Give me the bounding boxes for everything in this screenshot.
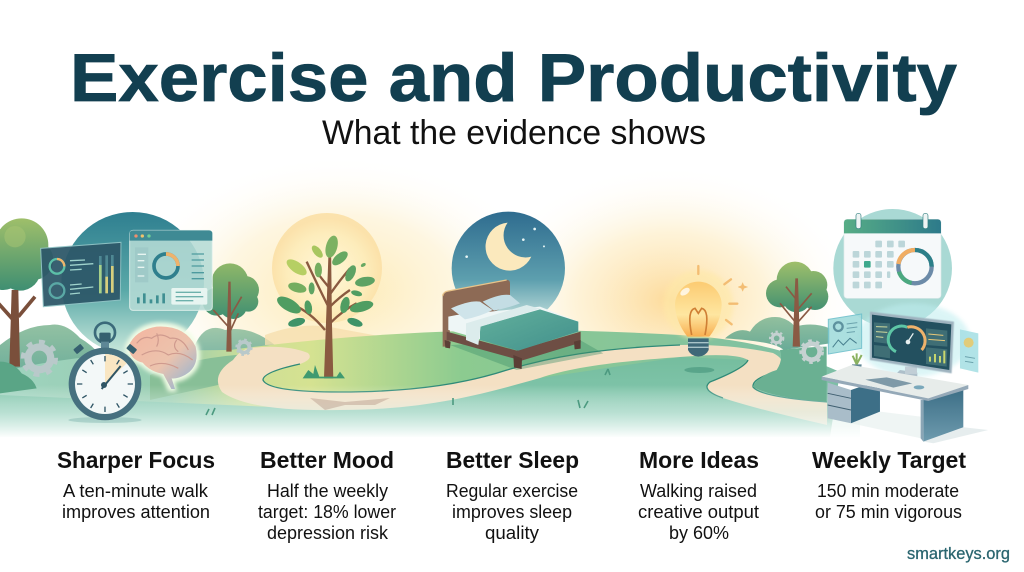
monitor [870, 312, 954, 377]
bulb rays [698, 266, 748, 324]
winding path [218, 345, 827, 425]
grass tufts [206, 369, 610, 415]
light dashboard [130, 230, 212, 310]
column: weekly target: 150 min moderate [817, 481, 959, 501]
subtitle: What the evidence shows [322, 114, 706, 152]
light bulb [663, 270, 733, 373]
column: sharper focus: Sharper Focus [57, 447, 215, 473]
illustrated landscape [0, 155, 988, 443]
column: weekly target: or 75 min vigorous [815, 502, 962, 522]
sleep section [443, 212, 603, 370]
ground [0, 330, 840, 437]
calendar backing circle [833, 209, 952, 328]
title: Exercise and Productivity [70, 40, 957, 116]
column: weekly target [812, 447, 966, 522]
bush [0, 362, 37, 393]
left mound [150, 353, 280, 400]
column: sharper focus: A ten-minute walk [63, 481, 209, 501]
left tree [0, 218, 53, 367]
second tree [203, 263, 259, 352]
dark dashboard [41, 242, 121, 307]
tree roots shadow [310, 398, 390, 410]
bed shadow [450, 340, 603, 370]
column: better mood: Better Mood [260, 447, 394, 473]
mood section: sun and tree [272, 213, 390, 410]
column: better sleep [446, 447, 579, 543]
column: better mood: Half the weekly [267, 481, 388, 501]
column: sharper focus [57, 447, 215, 522]
column: more ideas: More Ideas [639, 447, 759, 473]
floating panel left [828, 314, 862, 354]
right hills [725, 317, 830, 350]
bed [443, 280, 581, 369]
distant hills [0, 325, 400, 380]
focus section [0, 212, 259, 423]
gear small [236, 340, 252, 355]
stars [465, 228, 545, 258]
gears [770, 332, 823, 363]
brain [125, 323, 200, 392]
lower meadow [0, 357, 830, 437]
column: more ideas [638, 447, 759, 543]
column: weekly target: Weekly Target [812, 447, 966, 473]
column: more ideas: Walking raised [640, 481, 757, 501]
gear left [23, 342, 56, 375]
source credit: smartkeys.org [907, 545, 1010, 563]
green mound [753, 347, 827, 402]
growing tree [274, 234, 376, 378]
ideas section [663, 209, 988, 443]
moon [486, 223, 531, 271]
column: better sleep: Regular exercise [446, 481, 578, 501]
calendar [844, 213, 941, 298]
column: sharper focus: improves attention [62, 502, 210, 522]
desk [822, 365, 988, 443]
monitor glow [857, 303, 970, 377]
right tree [766, 262, 828, 347]
plant [852, 353, 862, 373]
column: better sleep: improves sleep [452, 502, 572, 522]
column: better mood: depression risk [267, 523, 389, 543]
focus teal circle [61, 212, 204, 355]
column: better mood: target: 18% lower [258, 502, 396, 522]
column: better sleep: Better Sleep [446, 447, 579, 473]
night circle [452, 212, 565, 325]
column: more ideas: creative output [638, 502, 759, 522]
column: better sleep: quality [485, 523, 539, 543]
column: better mood [258, 447, 396, 543]
floating panel right [960, 329, 978, 373]
column: more ideas: by 60% [669, 523, 729, 543]
sun circle [272, 213, 382, 323]
ground fade [0, 385, 860, 438]
green path edge [263, 345, 680, 392]
stopwatch [68, 323, 142, 423]
